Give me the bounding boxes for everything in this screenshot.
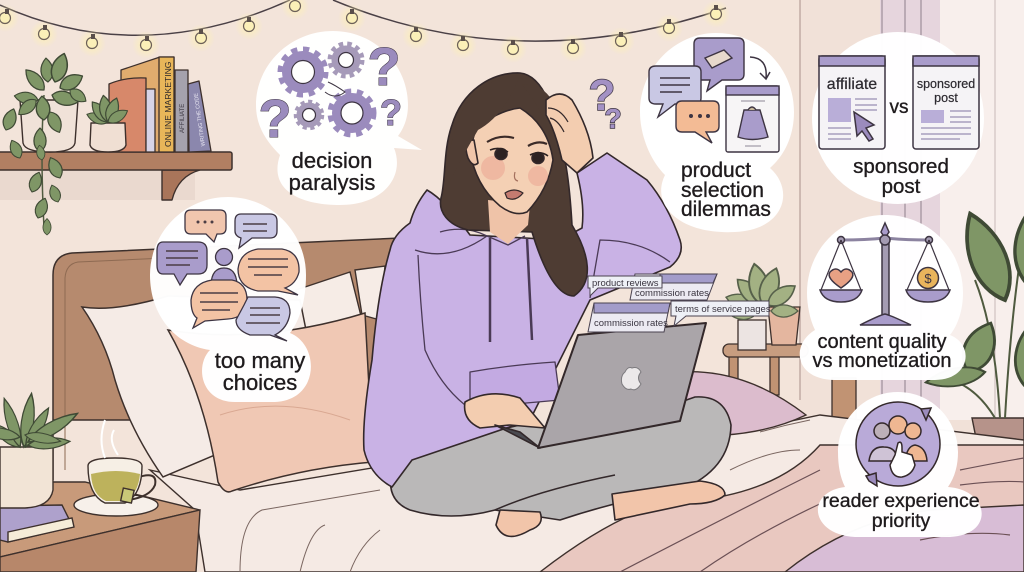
icon: chat bubbles [649,38,744,143]
tooltip: product reviews: product reviews [592,278,659,289]
label: commission rates back: commission rates [635,288,709,299]
label: selection [681,179,764,202]
books: WRITING THE CODE [194,92,207,147]
tooltip: terms of service pages: terms of service pages [675,304,771,315]
label: dilemmas [681,198,771,221]
bubble: reader experience priority [818,392,982,537]
neck [488,200,530,244]
gray pants [390,397,731,520]
icon: product page window [726,86,779,152]
icon: gears [281,44,373,134]
face [466,108,553,214]
icon: succulent pot [85,94,130,152]
icon: question marks: ? [258,89,292,149]
label: decision [292,148,372,173]
icon: balance scale [820,223,950,325]
books: AFFILIATE [180,104,186,133]
icon: tea cup [74,420,158,516]
bubble: too many choices [150,197,311,402]
icon: chat bubbles [157,210,299,341]
hair front strands [443,75,555,195]
icon: trailing ivy plant [0,51,89,235]
icon: question marks: ? [380,92,402,133]
label: vs monetization [813,350,951,372]
label: paralysis [289,170,375,195]
hoodie folds and drawstrings [415,229,670,408]
icon: question marks [258,37,402,149]
icon: potted plant [0,393,80,508]
back pillows [296,266,385,330]
question marks near head: ? [589,71,615,120]
laptop [495,323,706,448]
woman at laptop [364,73,731,536]
hair [440,73,587,296]
label: post [882,175,921,198]
right side table with plants [723,262,856,428]
label: priority [872,510,931,532]
feet [496,481,725,536]
books [109,57,211,152]
book stack [0,505,74,542]
bubble: product selection dilemmas [640,33,794,232]
label: commission rates front: commission rates [594,318,668,329]
lavender hoodie [364,153,681,487]
curtains and wall panel [800,0,1024,440]
label: vs: vs [890,97,908,118]
icon: readers circle [856,402,940,486]
icon: question marks: ? [368,37,400,97]
tooltip: product reviews [588,276,662,296]
right purple pillow [680,372,806,435]
floating browser tabs and tooltips [588,274,771,332]
label: content quality [818,331,946,353]
bubble: sponsored post [812,32,984,204]
nightstand with tea and plant [0,393,200,572]
browser: affiliate [819,56,885,149]
label: product [681,159,751,182]
big right floor plant [924,203,1024,448]
browser: sponsored post: sponsored [917,77,975,91]
sheet folds [240,420,810,572]
wall shelf with books and plants [0,51,232,235]
headboard [53,238,400,480]
bubble: decision paralysis [256,31,422,205]
icon: arrow [750,57,770,79]
browser: sponsored post: post [934,91,958,105]
tooltip: terms of service pages [671,301,771,326]
icon: balance scale: $ [924,271,932,286]
label: choices [223,370,297,395]
label: reader experience [822,490,980,512]
question marks near head [589,71,622,134]
bed sheet [150,415,1024,572]
raised hand [546,94,593,173]
pillows on bed [82,296,373,492]
left hand [465,394,545,428]
bubble: content quality vs monetization [800,215,966,380]
label: sponsored [853,155,949,178]
string lights [0,0,730,63]
question marks near head: ? [604,103,622,134]
label: too many [215,348,305,373]
browser: affiliate: affiliate [827,76,877,93]
pink and purple blanket [540,445,1024,572]
books: ONLINE MARKETING [163,61,173,147]
browser: sponsored post [913,56,979,149]
